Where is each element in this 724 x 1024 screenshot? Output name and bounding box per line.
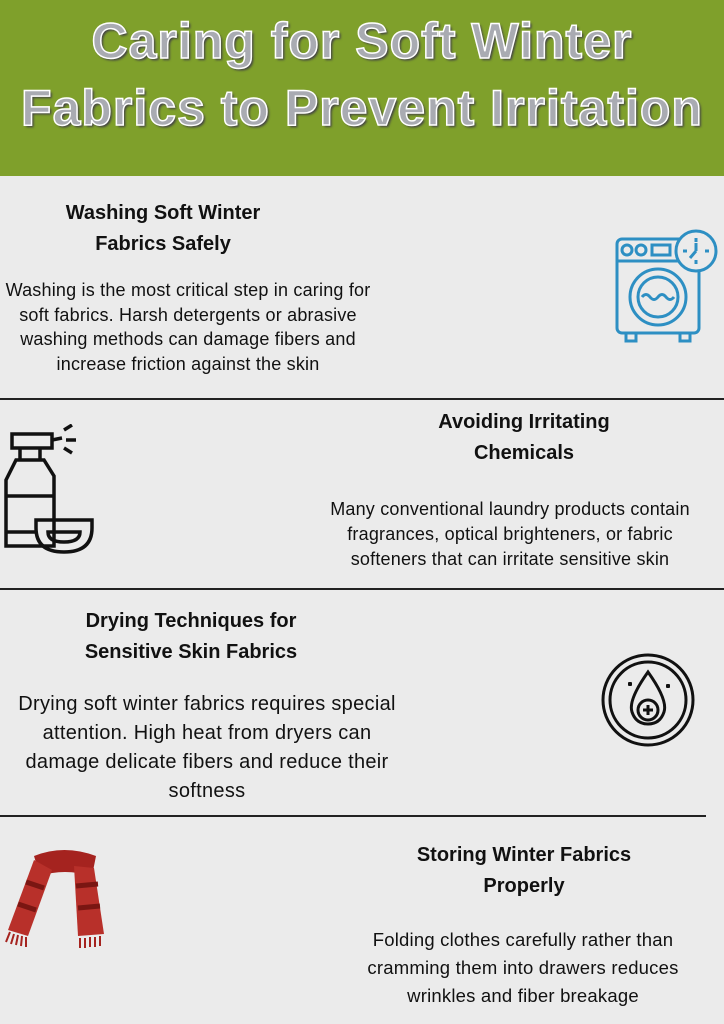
heading: washing: Washing Soft Winter [66,202,260,224]
text: storing: Folding clothes carefully rather than [373,929,673,950]
text: drying: attention. High heat from dryers can [43,722,371,744]
text: chemicals: fragrances, optical brighteners, or fabric [347,524,673,544]
text: chemicals: softeners that can irritate sensitive skin [351,549,669,569]
heading: chemicals [438,411,610,464]
text: washing: soft fabrics. Harsh detergents or abrasive [19,304,357,324]
text: storing: cramming them into drawers reduces [367,957,679,978]
text: washing [6,280,370,374]
text: storing [367,929,679,1006]
icon: drop badge [602,654,694,746]
text: washing: Washing is the most critical step in caring for [6,280,370,300]
icon: washing machine [616,230,718,342]
heading: washing [66,202,260,255]
heading: drying [85,610,297,663]
text: washing: washing methods can damage fibers and [20,329,356,349]
heading: drying: Drying Techniques for [86,610,296,632]
text: storing: wrinkles and fiber breakage [407,985,639,1006]
heading: storing: Properly [483,875,565,897]
header banner [0,0,724,176]
text: drying [18,693,396,802]
text: chemicals: Many conventional laundry products contain [330,499,690,519]
text: drying: softness [169,780,245,802]
icon: red scarf [5,850,104,948]
heading: chemicals: Chemicals [474,442,574,464]
title: Fabrics to Prevent Irritation [21,80,703,136]
heading: washing: Fabrics Safely [95,233,231,255]
title [21,13,703,136]
text: chemicals [330,499,690,569]
text: drying: Drying soft winter fabrics requires special [18,693,396,715]
text: drying: damage delicate fibers and reduce their [25,751,389,773]
heading: storing [417,844,631,897]
title: Caring for Soft Winter [92,13,632,69]
heading: storing: Storing Winter Fabrics [417,844,631,866]
icon: spray bottle [4,424,94,554]
text: washing: increase friction against the skin [57,354,319,374]
heading: drying: Sensitive Skin Fabrics [85,641,297,663]
heading: chemicals: Avoiding Irritating [438,411,610,433]
